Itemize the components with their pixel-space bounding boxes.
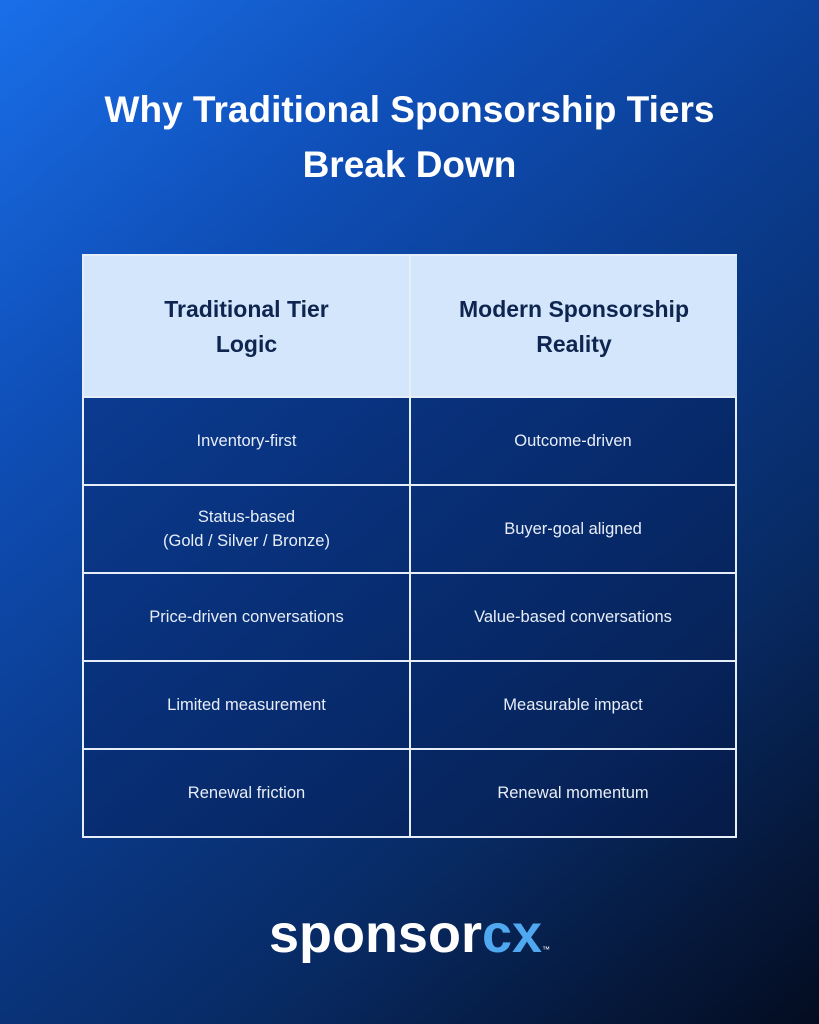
row 1 right: Outcome-driven bbox=[514, 432, 632, 450]
logo: sponsorcx™ bbox=[269, 904, 550, 964]
row 5 right bbox=[409, 748, 735, 836]
row 3 left: Price-driven conversations bbox=[149, 608, 344, 626]
row 4 left bbox=[84, 660, 409, 748]
title: Why Traditional Sponsorship Tiers bbox=[105, 89, 714, 130]
row 2 left bbox=[84, 484, 409, 572]
row 5 right: Renewal momentum bbox=[497, 784, 649, 802]
header: traditional: Logic bbox=[216, 330, 277, 356]
row 2 left: (Gold / Silver / Bronze) bbox=[163, 532, 330, 550]
row 5 left: Renewal friction bbox=[188, 784, 305, 802]
header: modern: Reality bbox=[536, 330, 612, 356]
title: Break Down bbox=[303, 144, 516, 185]
row 4 left: Limited measurement bbox=[167, 696, 326, 714]
row 1 left bbox=[84, 396, 409, 484]
row 3 left bbox=[84, 572, 409, 660]
row 2 right: Buyer-goal aligned bbox=[504, 520, 642, 538]
row 3 right bbox=[409, 572, 735, 660]
title bbox=[104, 89, 714, 185]
row 5 left bbox=[84, 748, 409, 836]
header: modern: Modern Sponsorship bbox=[459, 296, 689, 322]
row 2 left: Status-based bbox=[198, 508, 295, 526]
row 4 right bbox=[409, 660, 735, 748]
header: traditional bbox=[84, 256, 409, 397]
row 3 right: Value-based conversations bbox=[474, 608, 672, 626]
row 4 right: Measurable impact bbox=[503, 696, 643, 714]
header: modern bbox=[409, 256, 737, 397]
header: traditional: Traditional Tier bbox=[164, 296, 329, 322]
row 1 left: Inventory-first bbox=[197, 432, 296, 450]
comparison table bbox=[82, 254, 737, 838]
row 1 right bbox=[409, 396, 735, 484]
row 2 right bbox=[409, 484, 735, 572]
